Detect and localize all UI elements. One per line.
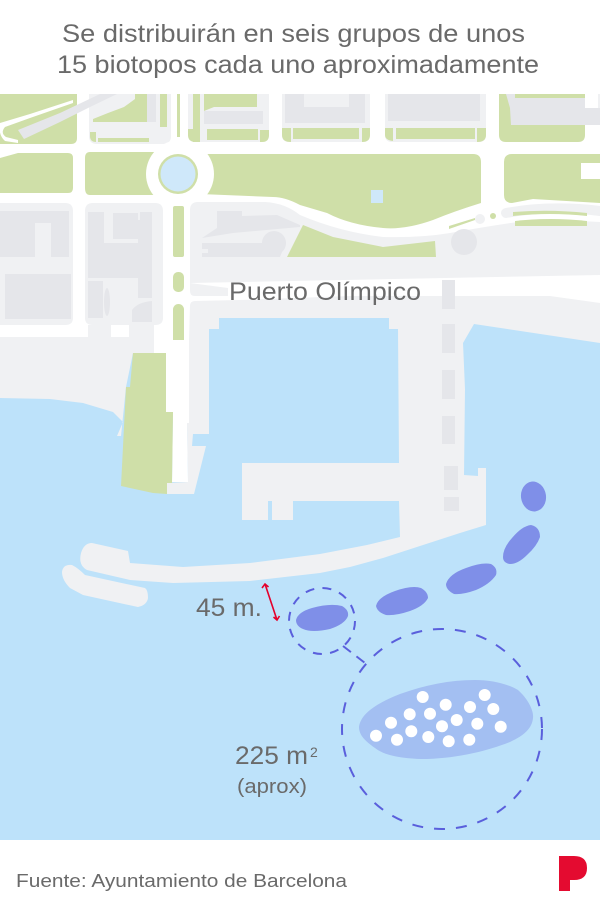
dashed circle: small group highlight	[289, 588, 355, 654]
panel: left city blocks	[0, 203, 184, 346]
panel: port land	[0, 280, 600, 607]
label: 225 m2 (aprox): 2	[310, 744, 318, 760]
panel: central park strip and roundabout	[0, 140, 600, 228]
dashed circle: enlarged group	[342, 629, 542, 829]
enlarged biotope group with dots	[359, 680, 533, 759]
source: Fuente: Ayuntamiento de Barcelona	[16, 870, 348, 891]
title: 15 biotopos cada uno aproximadamente	[57, 51, 539, 79]
label: 225 m2 (aprox): (aprox)	[237, 776, 307, 798]
arrow: 45 m distance	[262, 584, 280, 620]
label: 225 m2 (aprox): 225 m	[235, 742, 308, 770]
title: Se distribuirán en seis grupos de unos	[62, 20, 525, 48]
label: 45 m.: 45 m.	[196, 594, 262, 622]
panel: top city blocks	[0, 94, 600, 156]
title	[57, 20, 539, 79]
icon: publisher logo	[559, 856, 587, 891]
label: Puerto Olímpico: Puerto Olímpico	[229, 278, 421, 306]
dashed connector	[343, 646, 365, 663]
label: 225 m2 (aprox)	[235, 742, 318, 798]
panel: waterfront land and buildings	[190, 202, 600, 296]
biotope groups	[296, 480, 548, 631]
